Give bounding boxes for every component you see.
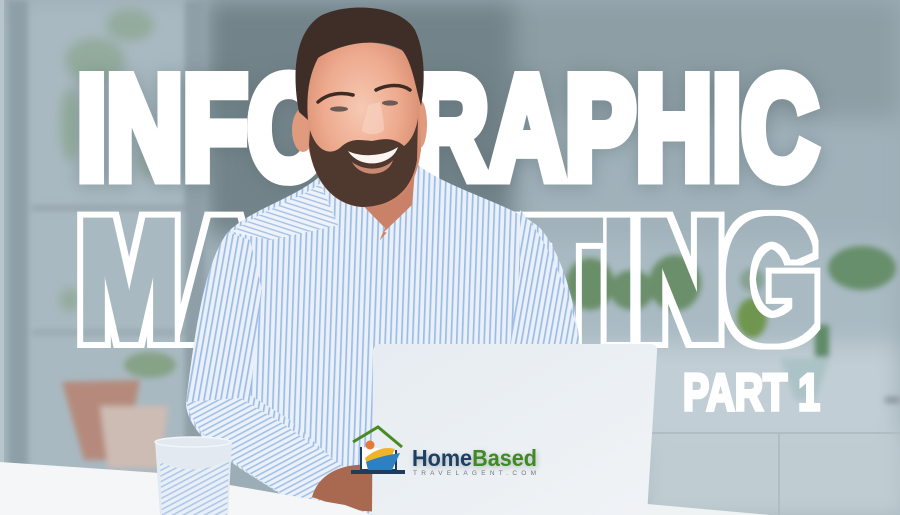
neck xyxy=(335,170,415,240)
logo shadow: HomeBased xyxy=(413,447,538,473)
lip below smile xyxy=(352,160,393,174)
logo icon: house and cruise ship xyxy=(351,427,405,474)
eyes xyxy=(330,100,398,112)
logo text: HomeBased: HomeBased xyxy=(412,445,537,471)
subheading: PART 1: PART 1 xyxy=(683,364,820,422)
table right xyxy=(647,504,770,515)
hair xyxy=(296,7,424,120)
nose xyxy=(362,102,384,134)
glass of water xyxy=(155,436,232,515)
beard xyxy=(309,118,418,207)
logo xyxy=(351,427,538,477)
collar left xyxy=(318,170,385,258)
man at laptop xyxy=(186,7,600,515)
shirt body xyxy=(186,165,600,515)
ears xyxy=(292,100,427,152)
collar right xyxy=(384,164,432,238)
eyebrows xyxy=(318,86,410,102)
logo text: TRAVELAGENT.COM: TRAVELAGENT.COM xyxy=(413,470,536,477)
table xyxy=(0,462,372,515)
face xyxy=(306,42,421,207)
smile xyxy=(348,147,398,163)
laptop xyxy=(372,344,657,515)
hand xyxy=(312,465,380,512)
